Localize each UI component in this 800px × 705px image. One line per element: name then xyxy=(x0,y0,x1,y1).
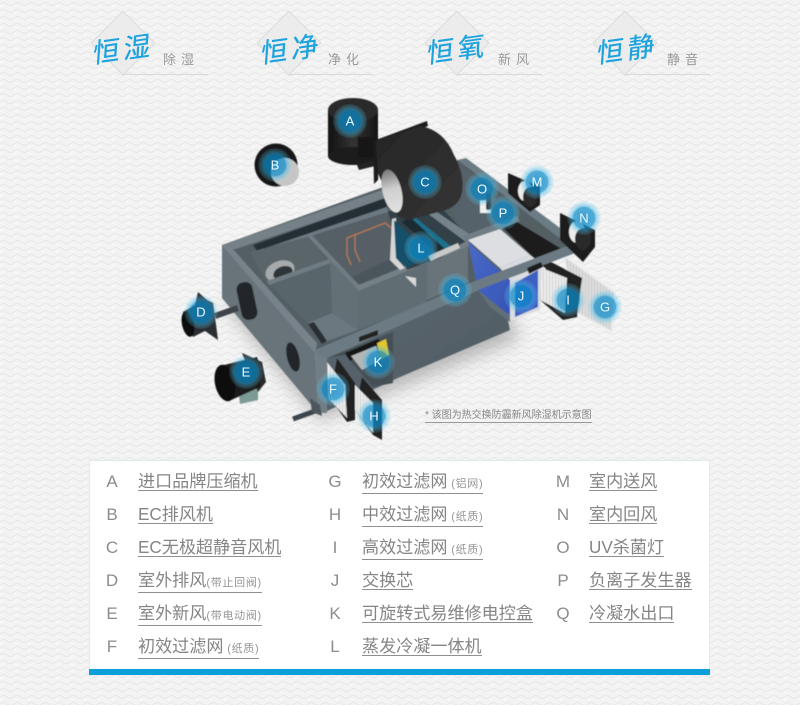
marker L: L xyxy=(417,240,425,256)
ground shadow xyxy=(225,300,520,420)
fan ring xyxy=(262,256,298,286)
letter A: A xyxy=(106,472,118,491)
item F: 初效过滤网 (纸质) xyxy=(138,637,259,656)
letter J: J xyxy=(331,571,339,590)
ventilation unit illustration xyxy=(179,98,615,440)
item A: 进口品牌压缩机 xyxy=(138,472,258,491)
icon: copper evaporator pipes xyxy=(347,223,428,265)
lower front area below bar xyxy=(318,285,510,412)
marker A: A xyxy=(346,114,355,128)
letter G: G xyxy=(328,472,342,491)
chamber divider front face xyxy=(268,262,332,323)
marker B: B xyxy=(271,158,279,172)
block front wall xyxy=(358,263,427,330)
marker D: D xyxy=(196,304,206,320)
marker E xyxy=(229,355,263,389)
item O: UV杀菌灯 xyxy=(589,538,664,557)
item D: 室外排风(带止回阀) xyxy=(138,571,262,590)
item I: 高效过滤网 (纸质) xyxy=(362,538,483,557)
marker A xyxy=(333,104,367,138)
letter F: F xyxy=(107,637,117,656)
letter L: L xyxy=(330,637,340,656)
marker C xyxy=(408,165,442,199)
fan chamber xyxy=(250,237,327,282)
item G: 初效过滤网 (铝网) xyxy=(362,472,483,491)
marker M xyxy=(520,165,554,199)
text: 恒静 xyxy=(596,23,660,71)
heading: 恒氧 新风: 恒氧 xyxy=(426,23,490,71)
wall opening lower xyxy=(284,341,302,373)
marker J: J xyxy=(518,288,524,304)
letter N: N xyxy=(557,505,569,524)
front post xyxy=(315,353,327,413)
letter H: H xyxy=(329,505,341,524)
inner left wall xyxy=(233,249,322,343)
item H: 中效过滤网 (纸质) xyxy=(362,505,483,524)
left wall xyxy=(222,245,318,413)
marker P: P xyxy=(499,206,507,220)
marker N xyxy=(567,201,601,235)
marker F: F xyxy=(329,382,337,396)
filter F xyxy=(327,358,355,422)
item M: 室内送风 xyxy=(589,472,657,491)
marker C: C xyxy=(420,174,430,190)
marker H xyxy=(357,399,391,433)
marker B xyxy=(258,148,292,182)
legend column 1 xyxy=(106,472,281,659)
rear top rim xyxy=(222,190,392,250)
filter H xyxy=(355,377,382,440)
marker J xyxy=(504,279,538,313)
marker P xyxy=(486,196,520,230)
marker Q xyxy=(438,273,472,307)
right side of block xyxy=(330,260,358,330)
marker L xyxy=(404,231,438,265)
marker O: O xyxy=(477,182,487,196)
text: 新风 xyxy=(498,52,534,67)
heading: 恒净 净化 xyxy=(256,10,373,75)
text: 除湿 xyxy=(163,52,199,67)
marker Q: Q xyxy=(450,282,460,298)
item L: 蒸发冷凝一体机 xyxy=(362,637,482,656)
icon: UV lamp xyxy=(480,193,491,213)
band under slot xyxy=(257,207,388,251)
panel accent bar xyxy=(89,669,710,675)
main frame front bar xyxy=(315,243,578,362)
dark duct behind frame xyxy=(503,222,560,268)
EC fan C xyxy=(373,121,463,219)
marker D xyxy=(184,295,218,329)
cross bars xyxy=(427,210,472,242)
legend column 2 xyxy=(328,472,533,656)
marker H: H xyxy=(369,408,379,424)
heading: 恒湿 除湿 xyxy=(90,10,208,75)
item P: 负离子发生器 xyxy=(589,571,692,590)
marker K: K xyxy=(374,354,383,370)
evaporator chamber xyxy=(307,212,402,287)
item J: 交换芯 xyxy=(362,571,413,590)
letter P: P xyxy=(557,571,569,590)
letter I: I xyxy=(333,538,337,557)
compressor A xyxy=(328,98,378,170)
marker F xyxy=(316,372,350,406)
letter M: M xyxy=(556,472,570,491)
item K: 可旋转式易维修电控盒 xyxy=(362,604,533,623)
letter C: C xyxy=(106,538,118,557)
letter Q: Q xyxy=(556,604,570,623)
left rim xyxy=(222,245,317,355)
marker E: E xyxy=(242,364,251,380)
legend column 3 xyxy=(556,472,692,623)
text: 恒净 xyxy=(260,23,324,71)
letter D: D xyxy=(106,571,118,590)
item B: EC排风机 xyxy=(138,505,213,524)
letter B: B xyxy=(106,505,118,524)
wall opening upper xyxy=(235,281,259,321)
EC exhaust fan B xyxy=(254,144,299,186)
item E: 室外新风(带电动阀) xyxy=(138,604,262,623)
exchanger section frame xyxy=(427,158,583,250)
text: 净化 xyxy=(328,52,364,67)
dark rear slot xyxy=(253,198,387,251)
item N: 室内回风 xyxy=(589,505,657,524)
heading: 恒氧 新风 xyxy=(424,10,542,75)
duct M xyxy=(508,173,540,212)
panel: parts legend xyxy=(89,460,710,669)
marker G xyxy=(588,290,622,324)
outdoor fresh air duct E xyxy=(211,353,266,404)
duct N xyxy=(560,213,595,262)
evaporator coil L xyxy=(388,198,470,270)
electrical box K xyxy=(327,330,393,387)
drain pipe xyxy=(293,398,322,419)
unit body xyxy=(222,160,575,412)
footnote: * 该图为热交换防霾新风除湿机示意图 xyxy=(425,410,592,421)
lower chamber floor xyxy=(308,313,358,343)
letter K: K xyxy=(329,604,341,623)
letter E: E xyxy=(106,604,118,623)
heading: 恒湿 除湿: 恒湿 xyxy=(92,23,156,71)
interior base xyxy=(222,160,575,353)
callout markers xyxy=(184,104,622,433)
heat exchanger core J xyxy=(468,229,543,322)
text: 静音 xyxy=(667,52,703,67)
marker I: I xyxy=(566,292,570,308)
item Q: 冷凝水出口 xyxy=(589,604,674,623)
outdoor exhaust duct D xyxy=(179,292,238,340)
marker G: G xyxy=(600,300,610,314)
marker N: N xyxy=(579,210,589,226)
marker O xyxy=(465,172,499,206)
filter I xyxy=(540,260,582,320)
small wall notch xyxy=(405,276,416,287)
back right bar xyxy=(458,158,583,250)
heading: 恒静 静音 xyxy=(592,10,710,75)
filter G xyxy=(563,255,615,332)
item C: EC无极超静音风机 xyxy=(138,538,281,557)
marker K xyxy=(361,345,395,379)
marker M: M xyxy=(532,174,542,190)
letter O: O xyxy=(556,538,570,557)
marker I xyxy=(551,283,585,317)
